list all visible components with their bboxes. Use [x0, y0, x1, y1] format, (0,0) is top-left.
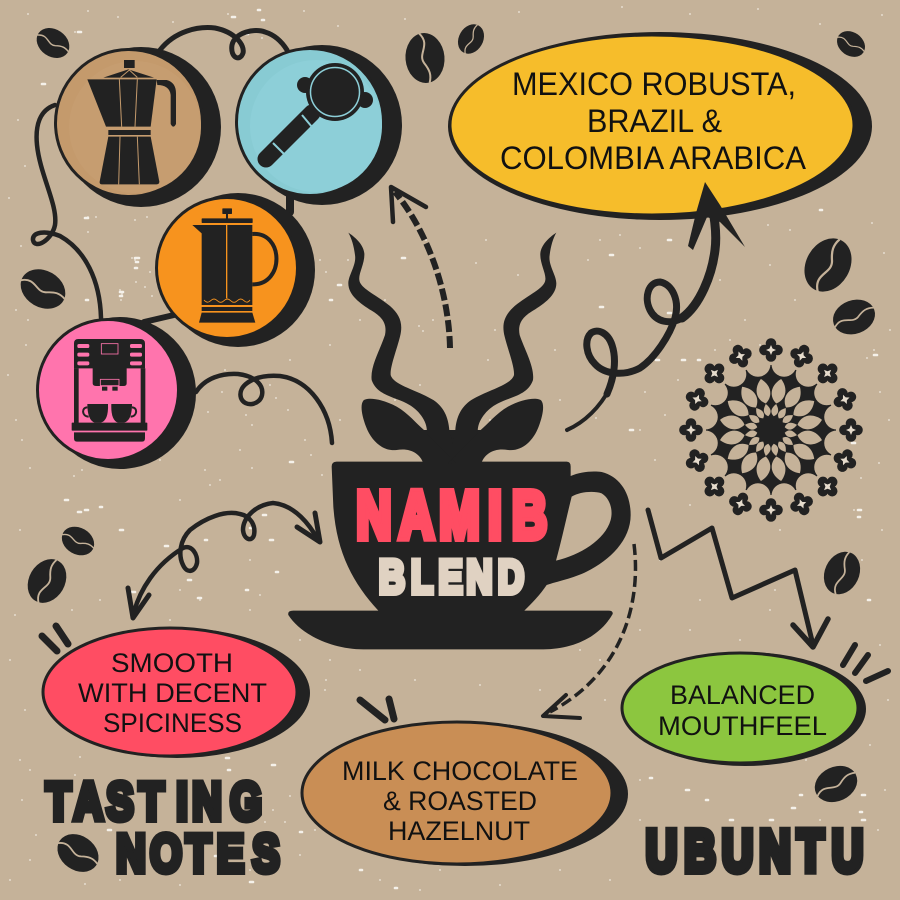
note text: [342, 756, 578, 846]
accent ticks: chocolate note: [360, 699, 394, 720]
arrow: dashed to chocolate note: [543, 544, 635, 718]
note text: WITH DECENT: [78, 678, 267, 708]
cup and saucer: [288, 462, 631, 649]
note text: MOUTHFEEL: [658, 711, 827, 741]
callout: balanced mouthfeel: [622, 652, 866, 766]
arrow: cup to origin: [567, 182, 745, 430]
heading: notes: NOTES: [116, 824, 280, 884]
kudu head and horns: [348, 233, 556, 463]
callout: smooth with decent spiciness: [43, 628, 310, 758]
cup title: NAMIB: NAMIB: [357, 478, 547, 553]
brand: ubuntu: UBUNTU: [646, 818, 863, 884]
accent ticks: smooth note: [42, 626, 68, 651]
note text: SMOOTH: [111, 648, 233, 678]
origin text: MEXICO ROBUSTA,: [512, 66, 796, 102]
icon: portafilter: [236, 45, 402, 205]
icon: moka pot: [56, 47, 221, 207]
arrow: dashed up to brewing tools: [391, 187, 450, 348]
note text: BALANCED: [670, 680, 815, 710]
connector: french press to coffee machine: [144, 315, 174, 322]
connector: portafilter to french press: [286, 196, 294, 212]
accent ticks: balanced note: [843, 645, 888, 681]
note text: [658, 680, 827, 741]
icon: espresso machine: [38, 317, 196, 469]
origin text: BRAZIL &: [587, 103, 722, 139]
note text: SPICINESS: [103, 708, 242, 738]
icon: french press: [156, 193, 315, 347]
cup title: BLEND: BLEND: [379, 550, 524, 603]
arrow: zigzag to balanced note: [648, 510, 828, 647]
note text: MILK CHOCOLATE: [342, 756, 578, 786]
note text: [78, 648, 267, 738]
callout: origin beans: [448, 32, 872, 220]
note text: HAZELNUT: [388, 816, 530, 846]
illustration: kudu coffee cup: [288, 233, 631, 649]
connector: coffee machine to cup: [196, 374, 332, 443]
ornament: mandala: [679, 338, 863, 522]
connector: moka to portafilter: [160, 28, 287, 58]
callout: milk chocolate and roasted hazelnut: [302, 722, 628, 866]
connector: moka to coffee machine: [33, 105, 101, 318]
arrow: double-headed swirl to smooth note: [128, 503, 320, 618]
note text: & ROASTED: [383, 786, 537, 816]
origin text: [500, 66, 807, 176]
origin text: COLOMBIA ARABICA: [500, 140, 807, 176]
heading: tasting: TASTING: [46, 772, 262, 832]
